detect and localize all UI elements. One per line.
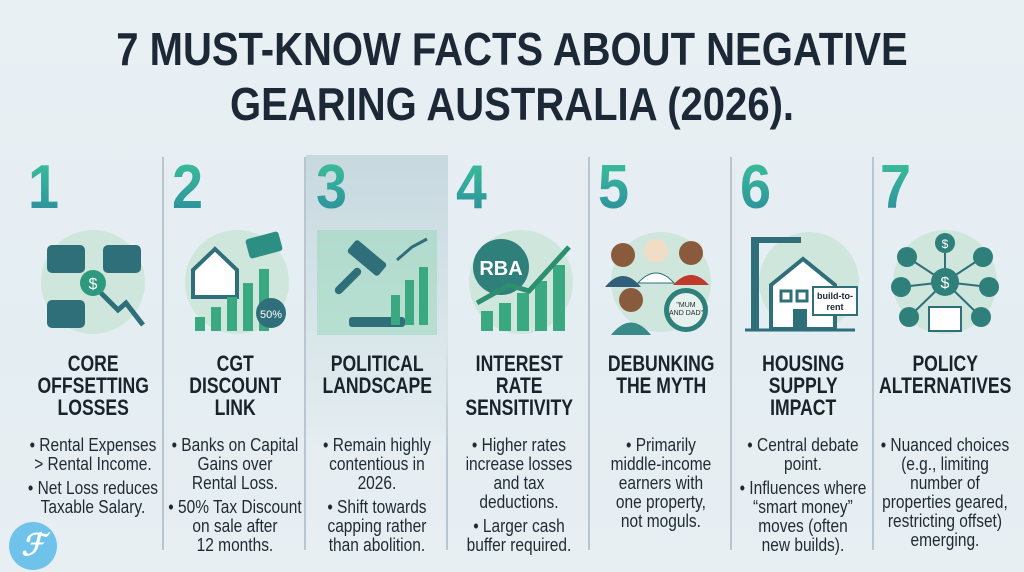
panel: 5 debunking the myth [598,153,714,531]
bullets: properties geared, [882,492,1008,512]
number 3: 3 [316,153,347,222]
heading: THE MYTH [616,373,706,398]
bullets: • Primarily [626,435,696,455]
heading: CGT [217,351,254,376]
heading [879,351,1011,398]
heading: CORE [68,351,119,376]
icon: people and badge: "MUM [676,302,696,309]
bullets: • Shift towards [327,497,427,517]
icon: people and badge [605,232,711,335]
heading [322,351,432,398]
heading: INTEREST [476,351,563,376]
heading [762,351,844,420]
bullets: • Net Loss reduces [28,478,158,498]
bullets: Taxable Salary. [41,497,145,517]
bullets: • Influences where [740,478,866,498]
bullets: point. [784,454,822,474]
bullets: • Higher rates [472,435,566,455]
bullets: 2026. [358,473,396,493]
bullets [323,435,431,555]
bullets: (e.g., limiting [901,454,989,474]
heading: POLITICAL [331,351,424,376]
heading: RATE [496,373,542,398]
bullets [168,435,302,555]
panel: 1 core offsetting losses [28,153,158,517]
heading: LOSSES [58,395,129,420]
bullets: buffer required. [467,535,571,555]
heading: LANDSCAPE [322,373,432,398]
bullets: new builds). [762,535,844,555]
panel: 6 housing supply impact [740,153,866,555]
icon: RBA rising chart [469,230,573,334]
bullets [611,435,711,531]
bullets: • Central debate [747,435,859,455]
bullets: • Banks on Capital [172,435,298,455]
number 4: 4 [456,153,487,222]
bullets: Gains over [198,454,272,474]
heading [465,351,573,420]
icon: house and bars [185,230,289,334]
number 1: 1 [28,153,59,222]
bullets: • 50% Tax Discount [168,497,302,517]
icon: network of options: $ [941,275,950,292]
icon: crane and house: build-to- [817,291,853,301]
bullets: number of [910,473,980,493]
bullets: and tax [494,473,544,493]
panel: 3 political landscape (highlighted) [306,155,448,555]
heading: POLICY [912,351,978,376]
icon: house and bars: 50% [260,309,282,321]
heading: SUPPLY [769,373,838,398]
number 6: 6 [740,153,771,222]
logo badge [9,522,57,570]
bullets [740,435,866,555]
bullets: moves (often [758,516,848,536]
bullets [881,435,1009,550]
icon: RBA rising chart: RBA [479,258,523,280]
bullets: deductions. [479,492,559,512]
panel: 4 interest rate sensitivity [456,153,573,555]
heading [189,351,281,420]
heading [608,351,714,398]
bullets: restricting offset) [888,511,1002,531]
icon: gavel and chart [317,230,437,335]
bullets: than abolition. [329,535,425,555]
heading: DISCOUNT [189,373,281,398]
heading: HOUSING [762,351,844,376]
bullets: 12 months. [197,535,273,555]
bullets: middle-income [611,454,711,474]
number 5: 5 [598,153,629,222]
bullets: contentious in [329,454,425,474]
icon: wallets cycle: $ [89,276,98,293]
panel: 7 policy alternatives [879,153,1011,550]
heading [37,351,149,420]
panel: 2 cgt discount link [168,153,302,555]
bullets: emerging. [911,530,979,550]
bullets: • Rental Expenses [30,435,156,455]
heading: DEBUNKING [608,351,714,376]
icon: crane and house [745,232,859,332]
title [116,23,908,130]
heading: OFFSETTING [37,373,149,398]
heading: LINK [215,395,256,420]
number 2: 2 [172,153,203,222]
heading: ALTERNATIVES [879,373,1011,398]
bullets: > Rental Income. [34,454,152,474]
bullets: on sale after [192,516,278,536]
bullets: earners with [619,473,703,493]
bullets: capping rather [327,516,426,536]
logo badge: ℱ [21,529,45,562]
icon: wallets cycle [41,230,145,334]
title: 7 MUST-KNOW FACTS ABOUT NEGATIVE [116,23,908,75]
heading: IMPACT [770,395,836,420]
title: GEARING AUSTRALIA (2026). [230,78,794,130]
bullets: • Remain highly [323,435,431,455]
icon: crane and house: rent [826,302,844,312]
bullets: “smart money” [753,497,853,517]
number 7: 7 [880,153,911,222]
icon: network of options [891,230,999,334]
bullets: • Nuanced choices [881,435,1009,455]
bullets: not moguls. [621,511,701,531]
bullets: Rental Loss. [192,473,278,493]
icon: network of options: $ [942,237,949,251]
icon: people and badge: AND DAD" [669,310,704,317]
bullets [28,435,158,517]
bullets [466,435,572,555]
bullets: one property, [616,492,706,512]
bullets: increase losses [466,454,572,474]
heading: SENSITIVITY [465,395,573,420]
bullets: • Larger cash [473,516,565,536]
